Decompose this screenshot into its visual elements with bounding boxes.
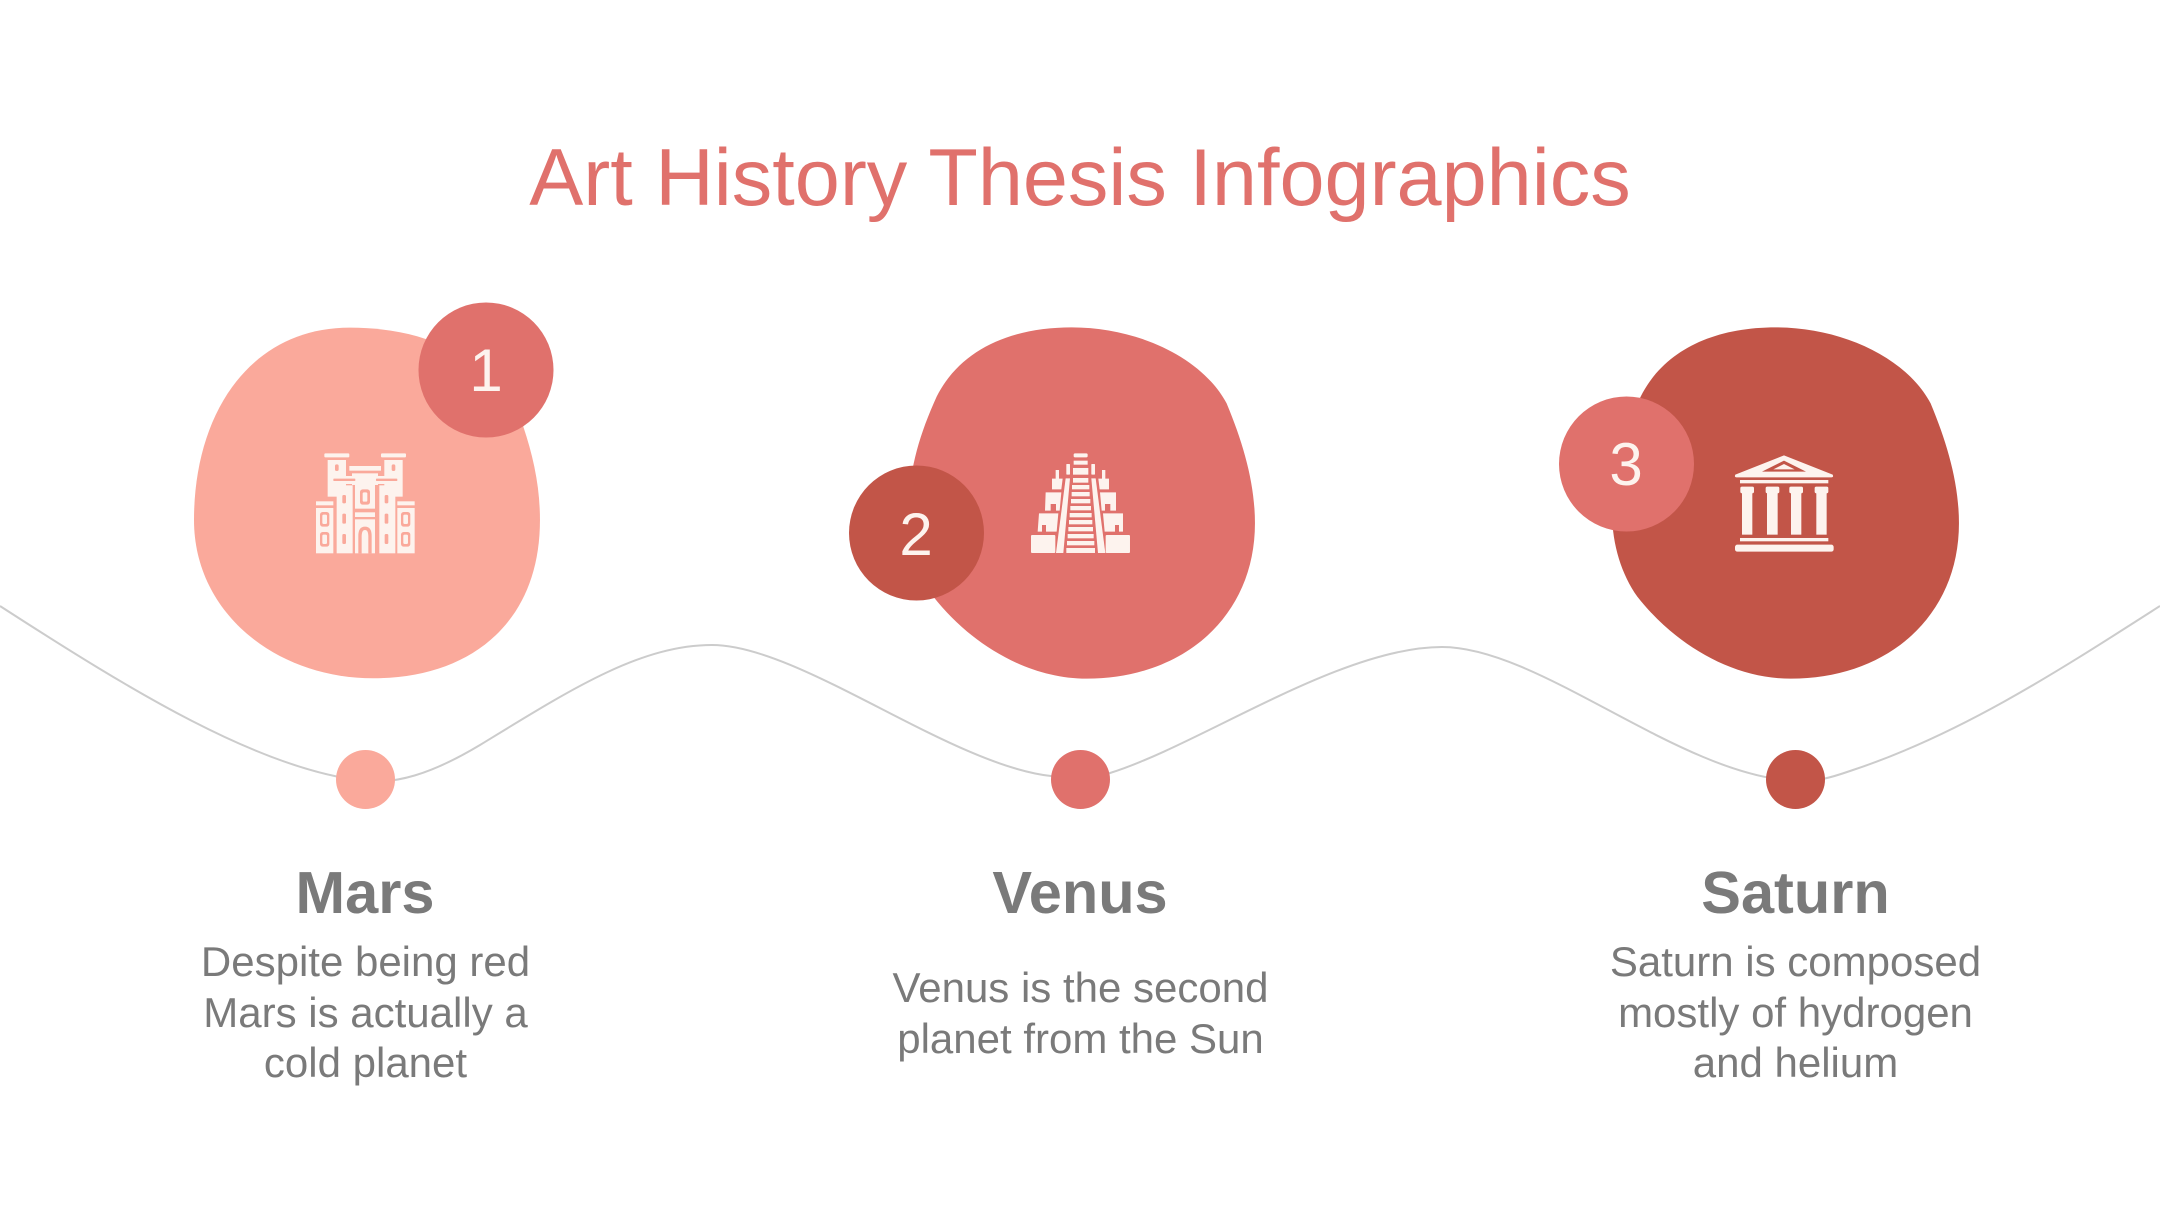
wavy timeline line [0, 606, 2160, 782]
blob: Mars [194, 328, 540, 678]
text: Venus description: Venus is the second [893, 964, 1268, 1011]
timeline dot: Mars [336, 750, 395, 809]
text: Saturn description: mostly of hydrogen [1618, 989, 1973, 1036]
text: Saturn description: Saturn is composed [1610, 938, 1981, 985]
icon: greek temple [1735, 455, 1834, 552]
text: Venus description: planet from the Sun [897, 1015, 1264, 1062]
number badge 2: 2 [899, 501, 933, 568]
number badge 3: 3 [1609, 431, 1643, 498]
text: Mars description: Despite being red [201, 938, 530, 985]
blob: Venus [908, 327, 1255, 679]
text: Mars description: Mars is actually a [203, 989, 528, 1036]
number badge 1 [418, 302, 554, 438]
blob: Saturn [1612, 327, 1959, 679]
heading: Saturn: Saturn [1701, 859, 1890, 926]
title: Art History Thesis Infographics [529, 133, 1631, 223]
number badge 2 [849, 466, 984, 600]
icon: stepped pyramid [1031, 453, 1130, 553]
icon: castle [316, 453, 415, 553]
heading: Mars: Mars [296, 859, 434, 926]
number badge 3 [1559, 396, 1694, 532]
text: Saturn description: and helium [1693, 1039, 1898, 1086]
timeline dot: Venus [1051, 750, 1110, 809]
number badge 1: 1 [469, 337, 503, 404]
text: Mars description: cold planet [264, 1039, 467, 1086]
timeline dot: Saturn [1766, 750, 1825, 809]
heading: Venus: Venus [992, 859, 1168, 926]
